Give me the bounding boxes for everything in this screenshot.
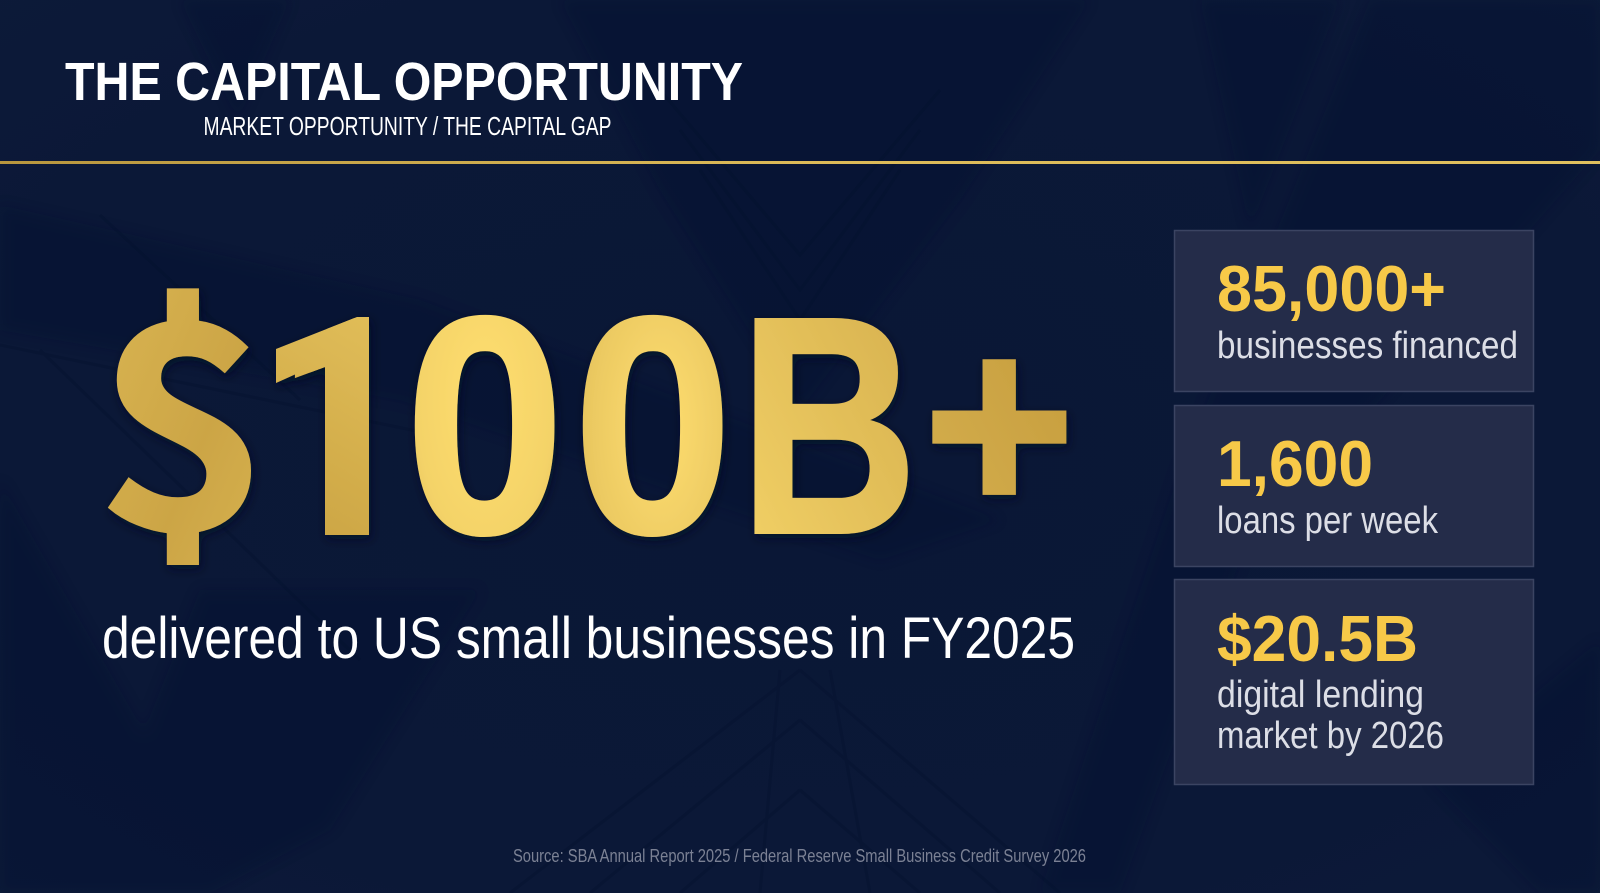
stat card: digital lending market: digital lending: [1217, 674, 1424, 716]
title: THE CAPITAL OPPORTUNITY: [65, 52, 743, 112]
stat card: businesses financed: [1174, 230, 1534, 392]
hero caption: delivered to US small businesses in FY2025: [102, 606, 1075, 671]
stat card: digital lending market: $20.5B: [1217, 602, 1418, 675]
source note: Source: SBA Annual Report 2025 / Federal Reserve Small Business Credit Survey 2026: [513, 846, 1086, 866]
hero figure: $100B+: B: [739, 253, 918, 599]
stat card: digital lending market: [1174, 580, 1534, 784]
stat card: loans per week: loans per week: [1217, 500, 1439, 542]
hero figure: $100B+: +: [924, 280, 1074, 568]
gold divider: [0, 161, 1600, 164]
hero figure: $100B+: 1: [209, 250, 450, 601]
stat card: digital lending market: market by 2026: [1217, 715, 1444, 757]
stat card: businesses financed: businesses financed: [1217, 325, 1518, 367]
hero figure: $100B+: [108, 288, 1069, 570]
subtitle: MARKET OPPORTUNITY / THE CAPITAL GAP: [204, 111, 612, 141]
stat card: loans per week: [1174, 406, 1534, 566]
stat card: loans per week: 1,600: [1217, 427, 1373, 500]
hero figure: $100B+: $: [96, 202, 270, 611]
hero figure: $100B+: 0: [405, 253, 565, 599]
hero figure: $100B+: 0: [573, 253, 733, 599]
stat card: businesses financed: 85,000+: [1217, 252, 1446, 325]
